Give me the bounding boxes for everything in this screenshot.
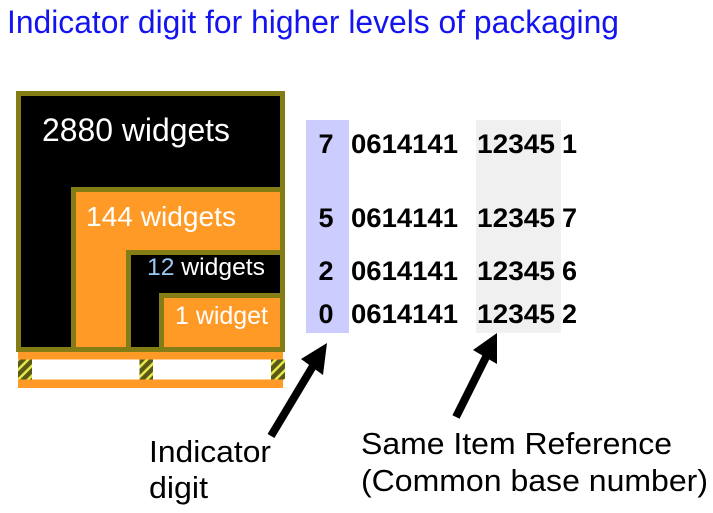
row: 0: 2 [562,299,577,329]
box: 1 widget: 1 widget [175,302,268,330]
barcode number rows [318,129,577,329]
row: 5: 5 [318,203,334,233]
row: 2: 6 [562,256,577,286]
packaging diagram [18,94,285,388]
box: 1 widget [162,296,282,350]
row: 2: 2 [318,256,334,286]
box: 144 widgets: 144 widgets [86,201,236,232]
row: 7: 7 [318,129,334,159]
box: 12 widgets: 12 widgets [147,254,265,281]
row: 2: 12345 [477,256,555,286]
row: 0: 0614141 [351,299,458,329]
row: 7: 12345 [477,129,555,159]
row: 7 [318,129,577,159]
item reference column highlight [476,120,561,333]
row: 7: 0614141 [351,129,458,159]
row: 2: 0614141 [351,256,458,286]
box: 2880 widgets: 2880 widgets [42,112,230,148]
arrow: to item reference [456,333,497,417]
box: 12 widgets [128,252,282,350]
label: same item reference: (Common base number) [361,464,708,498]
row: 0 [318,299,577,329]
indicator digit column highlight [306,120,349,333]
title: Indicator digit for higher levels of packaging [7,4,619,40]
row: 5 [318,203,577,233]
pallet [18,352,285,388]
label: indicator digit: Indicator [149,435,271,469]
box: 144 widgets [74,190,282,350]
label: same item reference: Same Item Reference [361,427,672,461]
row: 0: 12345 [477,299,555,329]
row: 2 [318,256,577,286]
row: 7: 1 [562,129,577,159]
box: 2880 widgets [18,94,282,350]
row: 5: 0614141 [351,203,458,233]
row: 5: 7 [562,203,577,233]
label: indicator digit: digit [149,471,209,505]
label: indicator digit [149,435,271,505]
arrow: to indicator digit [271,343,327,436]
label: same item reference [361,427,708,498]
row: 5: 12345 [477,203,555,233]
row: 0: 0 [318,299,334,329]
